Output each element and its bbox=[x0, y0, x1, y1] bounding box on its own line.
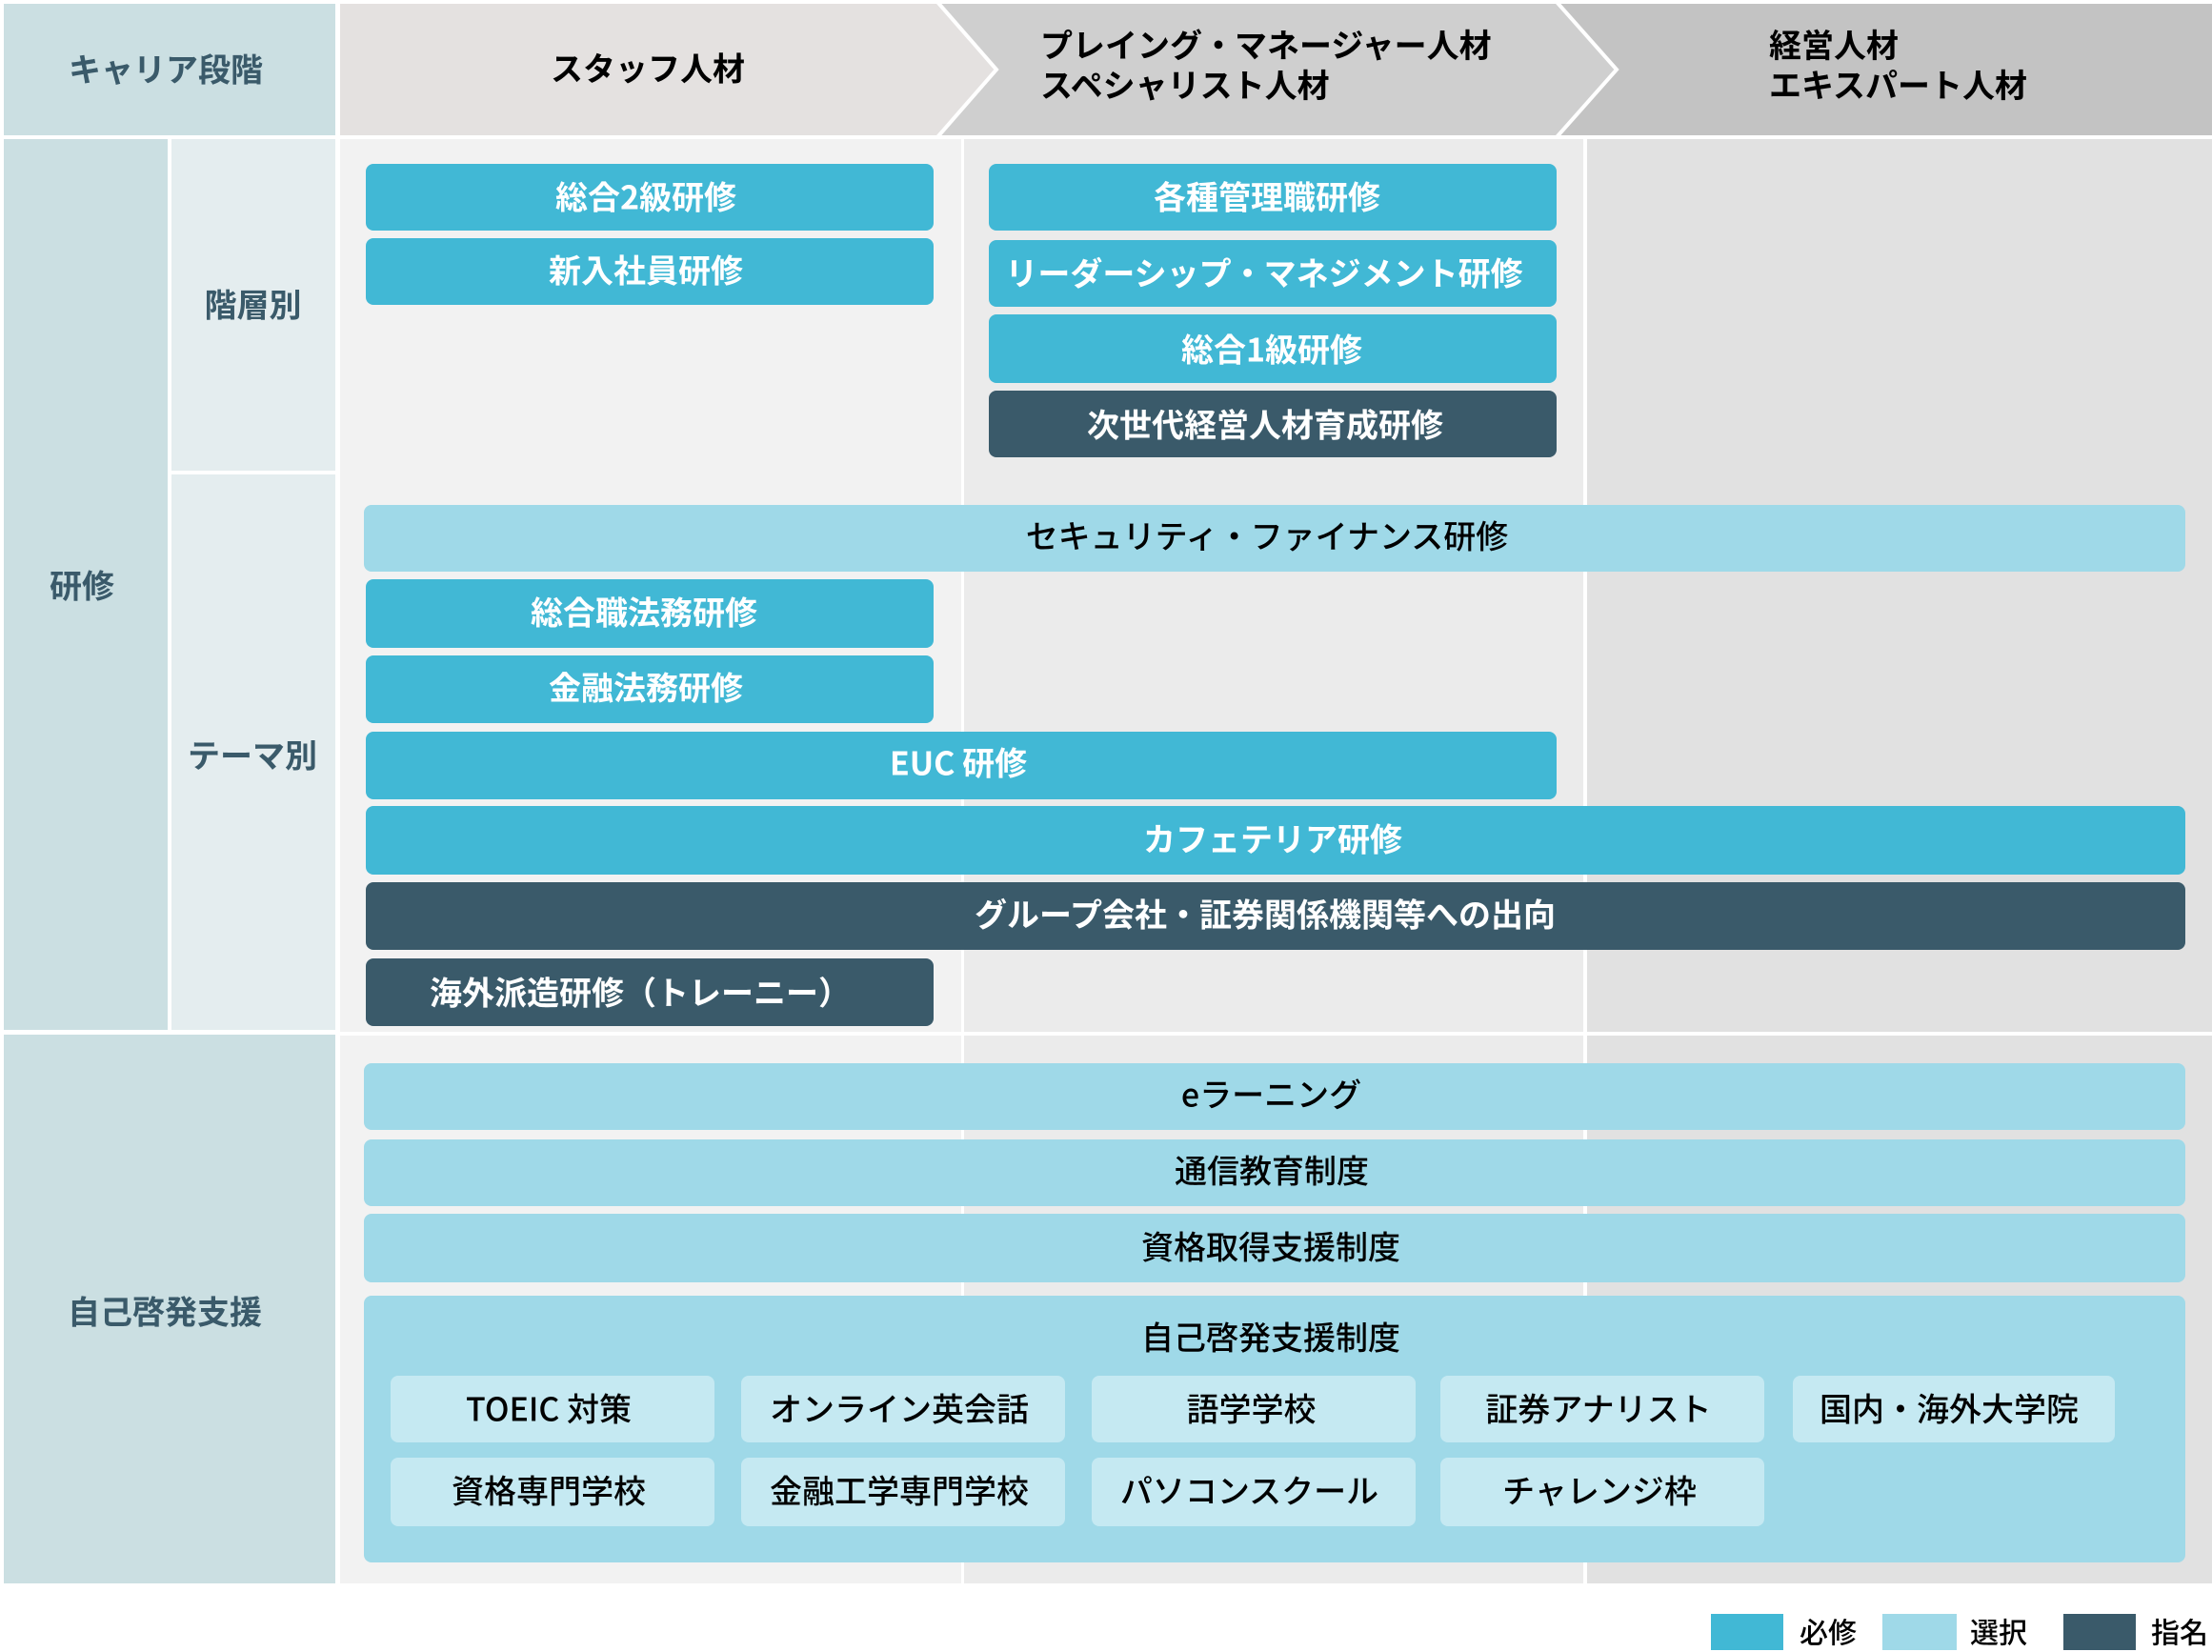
program: correspondence education: 通信教育制度 bbox=[1175, 1145, 1369, 1193]
stage: playing manager / specialist bbox=[1040, 20, 1492, 107]
row label: by level bbox=[171, 139, 335, 471]
row label: training: 研修 bbox=[50, 560, 114, 607]
course: group company secondment: グループ会社・証券関係機関等への出向 bbox=[975, 889, 1556, 936]
course: general legal bbox=[366, 579, 934, 648]
chip: universities bbox=[1793, 1376, 2115, 1442]
course: overseas trainee bbox=[366, 958, 934, 1026]
course: manager training: 各種管理職研修 bbox=[1154, 171, 1380, 219]
program: qualification support: 資格取得支援制度 bbox=[1141, 1221, 1400, 1269]
chip: computer school: パソコンスクール bbox=[1120, 1465, 1378, 1513]
program: correspondence education bbox=[364, 1139, 2185, 1206]
chip: securities analyst: 証券アナリスト bbox=[1485, 1383, 1712, 1431]
legend: elective: 選択 bbox=[1970, 1610, 2027, 1652]
course: cafeteria: カフェテリア研修 bbox=[1143, 814, 1402, 861]
program: e-learning: eラーニング bbox=[1181, 1069, 1361, 1117]
row label: by theme bbox=[171, 474, 335, 1030]
course: manager training bbox=[989, 164, 1557, 231]
stage: executive / expert: 経営人材 bbox=[1769, 20, 1899, 67]
course: leadership: リーダーシップ・マネジメント研修 bbox=[1005, 248, 1523, 295]
course: EUC bbox=[366, 732, 1557, 799]
course: new employee: 新入社員研修 bbox=[549, 246, 743, 292]
legend: elective bbox=[1882, 1610, 2027, 1652]
course: financial legal: 金融法務研修 bbox=[549, 662, 743, 709]
row label: self development support: 自己啓発支援 bbox=[68, 1286, 262, 1334]
row label: training bbox=[4, 139, 168, 1030]
career stage header label: キャリア段階 bbox=[69, 44, 263, 91]
chip: qualification school bbox=[391, 1458, 714, 1526]
career stage chevrons bbox=[340, 4, 2212, 135]
chip: language school: 語学学校 bbox=[1187, 1383, 1317, 1431]
chip: TOEIC: TOEIC 対策 bbox=[466, 1383, 632, 1431]
legend: required bbox=[1711, 1610, 1857, 1652]
course: EUC: EUC 研修 bbox=[890, 737, 1027, 784]
panel: self development support system bbox=[364, 1296, 2185, 1562]
column backgrounds: self development row bbox=[340, 1036, 2212, 1583]
chip: challenge quota bbox=[1440, 1458, 1764, 1526]
stage: executive / expert bbox=[1769, 20, 2027, 107]
panel heading: 自己啓発支援制度 bbox=[1141, 1313, 1400, 1359]
course: leadership bbox=[989, 240, 1557, 307]
row label: by theme: テーマ別 bbox=[188, 730, 317, 776]
course: group company secondment bbox=[366, 882, 2185, 950]
stage: playing manager / specialist: スペシャリスト人材 bbox=[1040, 59, 1330, 107]
legend: required: 必修 bbox=[1800, 1610, 1857, 1652]
course: general grade 1 bbox=[989, 314, 1557, 383]
course: next generation executive: 次世代経営人材育成研修 bbox=[1087, 400, 1443, 446]
chip: online English bbox=[741, 1376, 1065, 1442]
course: general grade 1: 総合1級研修 bbox=[1181, 324, 1362, 372]
course: overseas trainee: 海外派造研修（トレーニー） bbox=[430, 967, 851, 1014]
course: security finance: セキュリティ・ファイナンス研修 bbox=[1026, 511, 1508, 558]
chip: financial engineering school: 金融工学専門学校 bbox=[770, 1465, 1029, 1513]
stage: staff: スタッフ人材 bbox=[551, 44, 745, 90]
column backgrounds: training row bbox=[340, 139, 2212, 1032]
chip: universities: 国内・海外大学院 bbox=[1820, 1383, 2079, 1431]
chip: computer school bbox=[1092, 1458, 1416, 1526]
course: general grade 2 bbox=[366, 164, 934, 231]
program: qualification support bbox=[364, 1214, 2185, 1282]
course: security finance bbox=[364, 505, 2185, 572]
row label: by level: 階層別 bbox=[204, 280, 301, 326]
chip: TOEIC bbox=[391, 1376, 714, 1442]
chip: securities analyst bbox=[1440, 1376, 1764, 1442]
course: next generation executive bbox=[989, 391, 1557, 457]
course: general grade 2: 総合2級研修 bbox=[555, 171, 736, 219]
row label: self development support bbox=[4, 1035, 335, 1583]
chip: financial engineering school bbox=[741, 1458, 1065, 1526]
legend: designated bbox=[2063, 1610, 2208, 1652]
chip: online English: オンライン英会話 bbox=[770, 1383, 1029, 1431]
program: e-learning bbox=[364, 1063, 2185, 1130]
course: cafeteria bbox=[366, 806, 2185, 875]
stage: playing manager / specialist: プレイング・マネージャー人材 bbox=[1040, 20, 1492, 67]
course: general legal: 総合職法務研修 bbox=[531, 587, 757, 635]
chip: challenge quota: チャレンジ枠 bbox=[1502, 1465, 1697, 1513]
career stage header label bbox=[4, 4, 335, 135]
course: new employee bbox=[366, 238, 934, 305]
chip: qualification school: 資格専門学校 bbox=[452, 1465, 646, 1513]
legend: designated: 指名 bbox=[2151, 1610, 2208, 1652]
stage: executive / expert: エキスパート人材 bbox=[1769, 59, 2027, 107]
course: financial legal bbox=[366, 655, 934, 723]
chip: language school bbox=[1092, 1376, 1416, 1442]
